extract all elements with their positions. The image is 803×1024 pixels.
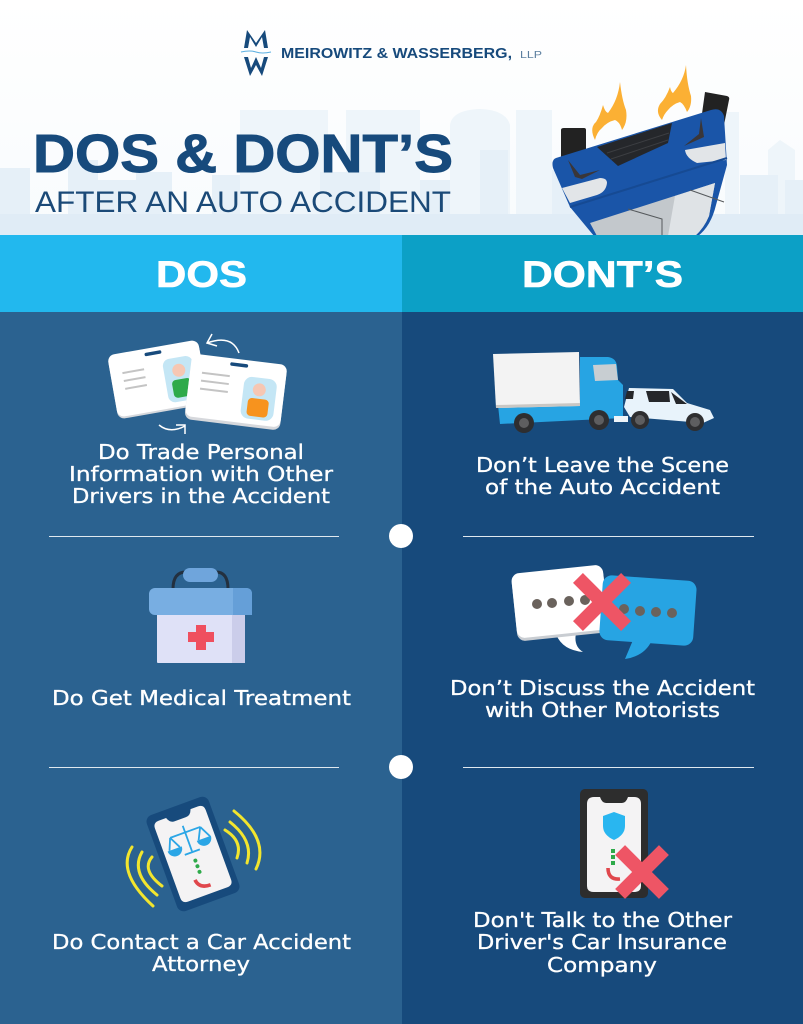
logo suffix: LLP xyxy=(520,49,542,61)
icon: exchanging id cards xyxy=(107,334,288,434)
text: do contact a car accident attorney xyxy=(52,930,351,976)
skyline background xyxy=(0,109,803,236)
signal waves xyxy=(127,811,260,906)
text: do not leave the scene: of the Auto Accident xyxy=(485,475,720,499)
left id card xyxy=(107,339,209,419)
title: DOS & DONT’S xyxy=(33,124,453,184)
divider with dot 2 xyxy=(49,755,754,779)
panel: dos header xyxy=(0,235,402,312)
red cross xyxy=(554,554,650,650)
text: do not talk to the insurance company xyxy=(473,908,733,977)
text: do not discuss the accident: Don’t Discuss the Accident xyxy=(450,676,755,700)
red cross xyxy=(598,828,686,916)
text: do not talk to the insurance company: Company xyxy=(547,953,657,977)
phone xyxy=(145,795,241,913)
icon: chat bubbles with cross xyxy=(511,554,697,659)
white chat bubble xyxy=(511,564,609,652)
donts heading: DONT’S xyxy=(522,254,683,295)
text: do trade personal information: Do Trade Personal xyxy=(98,440,304,464)
text: do trade personal information: Drivers in the Accident xyxy=(72,484,330,508)
text: do not leave the scene: Don’t Leave the Scene xyxy=(476,453,729,477)
subtitle: AFTER AN AUTO ACCIDENT xyxy=(35,186,451,219)
text: do contact a car accident attorney: Do Contact a Car Accident xyxy=(52,930,351,954)
icon: ringing phone with scales xyxy=(127,795,260,913)
text: do trade personal information xyxy=(69,440,334,508)
text: do trade personal information: Information with Other xyxy=(69,462,334,486)
header background xyxy=(0,0,803,236)
icon: truck and car collision xyxy=(493,352,714,433)
icon: medical kit xyxy=(149,568,252,663)
text: do get medical treatment: Do Get Medical Treatment xyxy=(52,686,351,710)
blue chat bubble xyxy=(599,575,697,659)
icon: phone with shield and cross xyxy=(580,789,686,916)
panel: donts column xyxy=(402,312,803,1024)
text: do not leave the scene xyxy=(476,453,729,499)
text: do not talk to the insurance company: Driver's Car Insurance xyxy=(477,930,727,954)
logo xyxy=(241,30,542,76)
logo mark xyxy=(241,30,271,76)
right id card xyxy=(184,353,288,431)
panel: donts header xyxy=(402,235,803,312)
text: do not talk to the insurance company: Don't Talk to the Other xyxy=(473,908,733,932)
text: do contact a car accident attorney: Attorney xyxy=(152,952,250,976)
icon: overturned burning car xyxy=(552,65,729,236)
text: do not discuss the accident: with Other Motorists xyxy=(485,698,720,722)
dos heading: DOS xyxy=(156,254,247,295)
panel: dos column xyxy=(0,312,402,1024)
divider with dot 1 xyxy=(49,524,754,548)
arrow: top exchange xyxy=(207,334,239,353)
logo wordmark: MEIROWITZ & WASSERBERG, xyxy=(281,46,512,62)
arrow: bottom exchange xyxy=(159,425,185,434)
text: do not discuss the accident xyxy=(450,676,755,722)
